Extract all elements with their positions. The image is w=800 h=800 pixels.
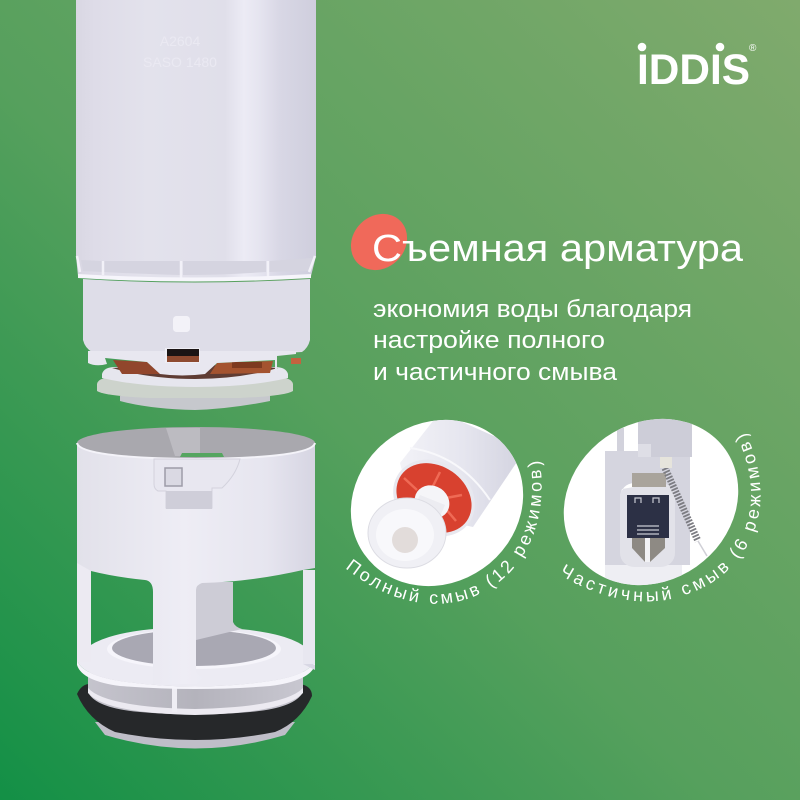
caption: full flush: Полный смыв (12 режимов) <box>346 462 544 604</box>
description: настройке полного <box>373 327 605 354</box>
steel plate <box>632 473 666 487</box>
white circle <box>531 385 771 619</box>
back strut <box>196 582 242 640</box>
bottom shell <box>95 722 295 748</box>
logo dots <box>638 43 646 51</box>
disc hole <box>392 527 418 553</box>
upper tube of the fitting <box>76 0 316 410</box>
accent blob <box>339 202 419 282</box>
description <box>373 296 692 386</box>
brown adjuster <box>113 360 160 374</box>
logo <box>637 43 757 94</box>
translucent ring <box>97 378 293 398</box>
cup body and struts <box>77 443 315 684</box>
upper cylinder <box>638 415 692 457</box>
clip window <box>154 459 240 508</box>
spring <box>665 468 698 541</box>
detail circle: partial flush <box>564 418 738 586</box>
collar lower band and tabs <box>88 351 302 376</box>
tube body <box>76 0 316 281</box>
lower cup with gasket <box>77 427 315 748</box>
mini tube <box>400 420 516 527</box>
upper disc <box>102 367 288 387</box>
embossed marking <box>143 33 217 70</box>
logo wordmark: IDDIS <box>637 46 750 94</box>
black gasket <box>77 684 312 740</box>
caption: partial flush: Частичный смыв (6 режимов) <box>563 434 761 602</box>
red regulator ring <box>393 464 466 536</box>
lowest disc <box>120 396 270 410</box>
ring spokes <box>404 472 462 521</box>
cup interior <box>77 427 315 459</box>
description: экономия воды благодаря <box>373 296 692 323</box>
registered mark: ® <box>749 43 757 54</box>
side post <box>617 428 624 452</box>
window <box>620 483 675 567</box>
ribs <box>77 256 315 278</box>
small button <box>173 316 190 332</box>
detail circle: full flush <box>350 420 524 586</box>
white disc <box>368 498 446 568</box>
steel fork <box>632 538 665 562</box>
ring hole <box>107 629 281 669</box>
white circle <box>318 386 556 620</box>
base ring <box>77 627 315 686</box>
rib panels <box>81 258 312 275</box>
device body <box>605 451 690 565</box>
heading: Съемная арматура <box>372 228 744 270</box>
collar <box>83 279 310 357</box>
embossed marking: A2604 <box>160 33 200 49</box>
gray cylinder <box>88 672 303 714</box>
embossed marking: SASO 1480 <box>143 54 217 70</box>
lip <box>77 443 315 459</box>
description: и частичного смыва <box>373 359 618 386</box>
dark scale panel <box>627 495 669 538</box>
slot <box>165 348 200 363</box>
ring opening <box>414 485 450 516</box>
stem <box>418 496 444 514</box>
